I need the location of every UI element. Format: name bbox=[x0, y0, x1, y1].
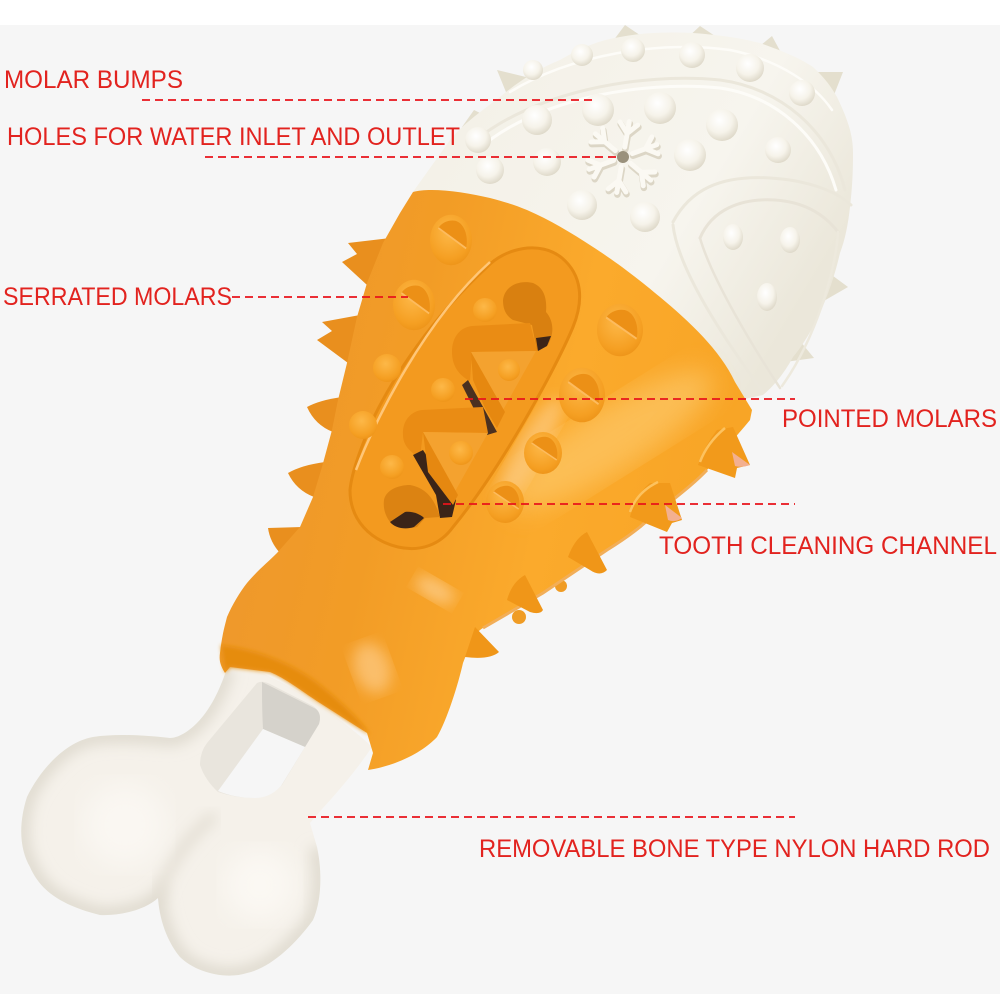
channel outline bbox=[350, 248, 580, 549]
product: chicken drumstick chew toy bbox=[21, 25, 853, 976]
leader lines bbox=[142, 100, 795, 817]
cone 2 bbox=[507, 575, 543, 613]
slot band one bbox=[452, 323, 537, 381]
snowflake water hole bbox=[581, 115, 665, 201]
dark gap two bbox=[413, 450, 456, 518]
cone 4 bbox=[630, 483, 682, 532]
channel studs bbox=[380, 298, 520, 479]
orange spikes left bbox=[268, 238, 390, 553]
slot band two bbox=[403, 407, 488, 458]
cone 3 bbox=[568, 532, 607, 574]
small orange studs bbox=[349, 354, 401, 439]
top white strip bbox=[0, 0, 1000, 25]
orange molars with slits bbox=[393, 215, 643, 523]
dark gap one bbox=[462, 380, 497, 435]
collar shadow band bbox=[221, 645, 370, 735]
lower collar highlights bbox=[346, 637, 398, 699]
label: pointed molars: POINTED MOLARS bbox=[782, 405, 997, 433]
bone hole inner wall bbox=[262, 682, 320, 747]
cream spikes bbox=[462, 25, 848, 362]
cone 1 bbox=[465, 627, 499, 658]
cream shell ridges bbox=[470, 47, 851, 392]
label: removable bone rod: REMOVABLE BONE TYPE NYLON HARD ROD bbox=[479, 835, 990, 863]
bone edge shading bbox=[21, 668, 320, 976]
lower edge cones bbox=[465, 427, 750, 658]
label: holes for water: HOLES FOR WATER INLET AND OUTLET bbox=[7, 123, 460, 151]
cream bumps bbox=[465, 38, 815, 311]
bone hole recess bbox=[200, 682, 320, 798]
bone rod bbox=[21, 665, 372, 976]
orange body bbox=[220, 190, 752, 770]
top keyhole bbox=[503, 282, 552, 351]
body highlight bbox=[491, 349, 729, 531]
tooth cleaning channel panel bbox=[350, 248, 580, 549]
label: serrated molars: SERRATED MOLARS bbox=[3, 283, 232, 311]
small extra nubs under body edge bbox=[512, 580, 567, 624]
bottom white strip bbox=[0, 994, 1000, 1000]
cream top shell bbox=[413, 32, 853, 400]
label: tooth cleaning channel: TOOTH CLEANING CHANNEL bbox=[659, 532, 997, 560]
tooth two face bbox=[423, 432, 458, 505]
upper collar highlight bbox=[411, 570, 459, 610]
tooth one face bbox=[471, 352, 505, 428]
label: molar bumps: MOLAR BUMPS bbox=[4, 66, 183, 94]
tooth two top bbox=[423, 432, 488, 500]
cone 5 bbox=[698, 427, 750, 478]
tooth one top bbox=[471, 351, 536, 420]
channel edge glow bbox=[488, 391, 572, 509]
lower-right edge rim bbox=[483, 470, 707, 628]
channel highlight bbox=[356, 262, 490, 470]
bone hole through opening bbox=[218, 729, 305, 798]
lower keyhole bbox=[384, 485, 440, 528]
